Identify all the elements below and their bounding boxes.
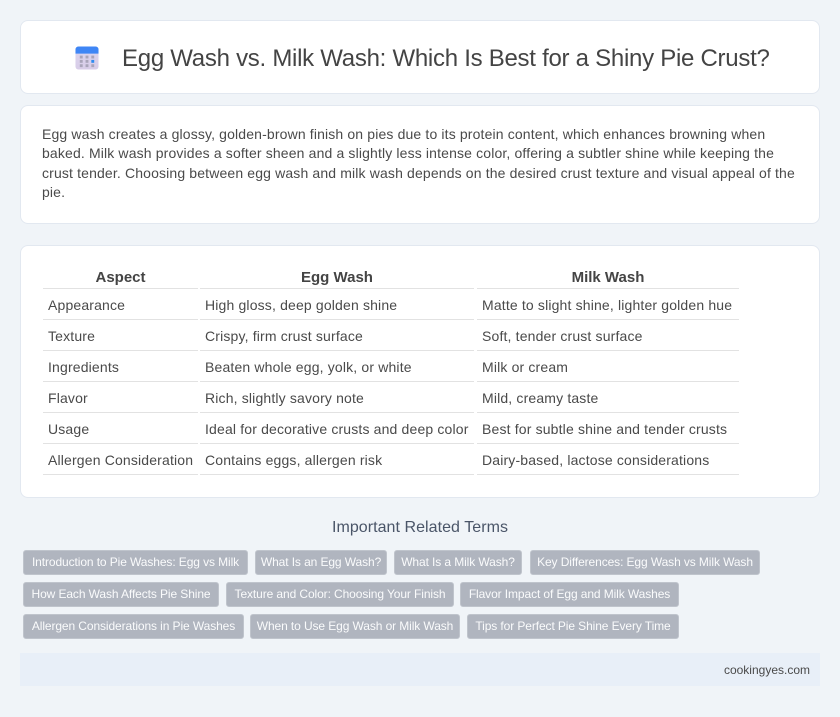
intro paragraph: Egg wash creates a glossy, golden-brown finish on pies due to its protein content, which enhances browning when [42, 126, 765, 142]
intro paragraph [42, 126, 795, 200]
icon: calendar [75, 46, 99, 70]
comparison table [43, 269, 739, 475]
footer bar [20, 653, 820, 686]
related terms tags: Introduction to Pie Washes: Egg vs Milk [32, 555, 239, 569]
related terms tags: When to Use Egg Wash or Milk Wash [257, 619, 453, 633]
comparison table: Best for subtle shine and tender crusts [482, 421, 727, 437]
comparison table: Mild, creamy taste [482, 390, 598, 406]
comparison table panel [20, 245, 820, 498]
comparison table: High gloss, deep golden shine [205, 297, 397, 313]
comparison table: Matte to slight shine, lighter golden hue [482, 297, 732, 313]
footer source: cookingyes.com [724, 663, 810, 677]
comparison table: Crispy, firm crust surface [205, 328, 363, 344]
intro paragraph: crust tender. Choosing between egg wash and milk wash depends on the desired crust texture and visual appeal of the [42, 165, 795, 181]
comparison table: Milk or cream [482, 359, 568, 375]
comparison table: Usage [48, 421, 89, 437]
related terms tags: Texture and Color: Choosing Your Finish [235, 587, 445, 601]
related terms tags: Tips for Perfect Pie Shine Every Time [475, 619, 671, 633]
comparison table: Ideal for decorative crusts and deep color [205, 421, 469, 437]
comparison table: Rich, slightly savory note [205, 390, 364, 406]
comparison table: Egg Wash [301, 269, 373, 286]
intro text panel [20, 105, 820, 224]
intro paragraph: baked. Milk wash provides a softer sheen and a slightly less intense color, offering a subtler shine while keeping the [42, 145, 774, 161]
comparison table: Aspect [95, 269, 146, 286]
related terms tags: Allergen Considerations in Pie Washes [32, 619, 235, 633]
related terms tags: Flavor Impact of Egg and Milk Washes [469, 587, 670, 601]
related terms tags [23, 550, 760, 639]
comparison table: Allergen Consideration [48, 452, 193, 468]
related terms tags: Key Differences: Egg Wash vs Milk Wash [537, 555, 753, 569]
comparison table: Appearance [48, 297, 125, 313]
title: Egg Wash vs. Milk Wash: Which Is Best for a Shiny Pie Crust? [122, 45, 770, 72]
comparison table: Texture [48, 328, 95, 344]
comparison table: Contains eggs, allergen risk [205, 452, 382, 468]
related terms tags: What Is a Milk Wash? [401, 555, 515, 569]
comparison table: Ingredients [48, 359, 119, 375]
related terms tags: How Each Wash Affects Pie Shine [32, 587, 210, 601]
header panel [20, 20, 820, 94]
comparison table: Flavor [48, 390, 88, 406]
comparison table: Soft, tender crust surface [482, 328, 643, 344]
intro paragraph: pie. [42, 184, 65, 200]
comparison table: Beaten whole egg, yolk, or white [205, 359, 412, 375]
comparison table: Dairy-based, lactose considerations [482, 452, 709, 468]
related terms heading: Important Related Terms [332, 519, 508, 536]
comparison table: Milk Wash [572, 269, 644, 286]
related terms tags: What Is an Egg Wash? [261, 555, 381, 569]
